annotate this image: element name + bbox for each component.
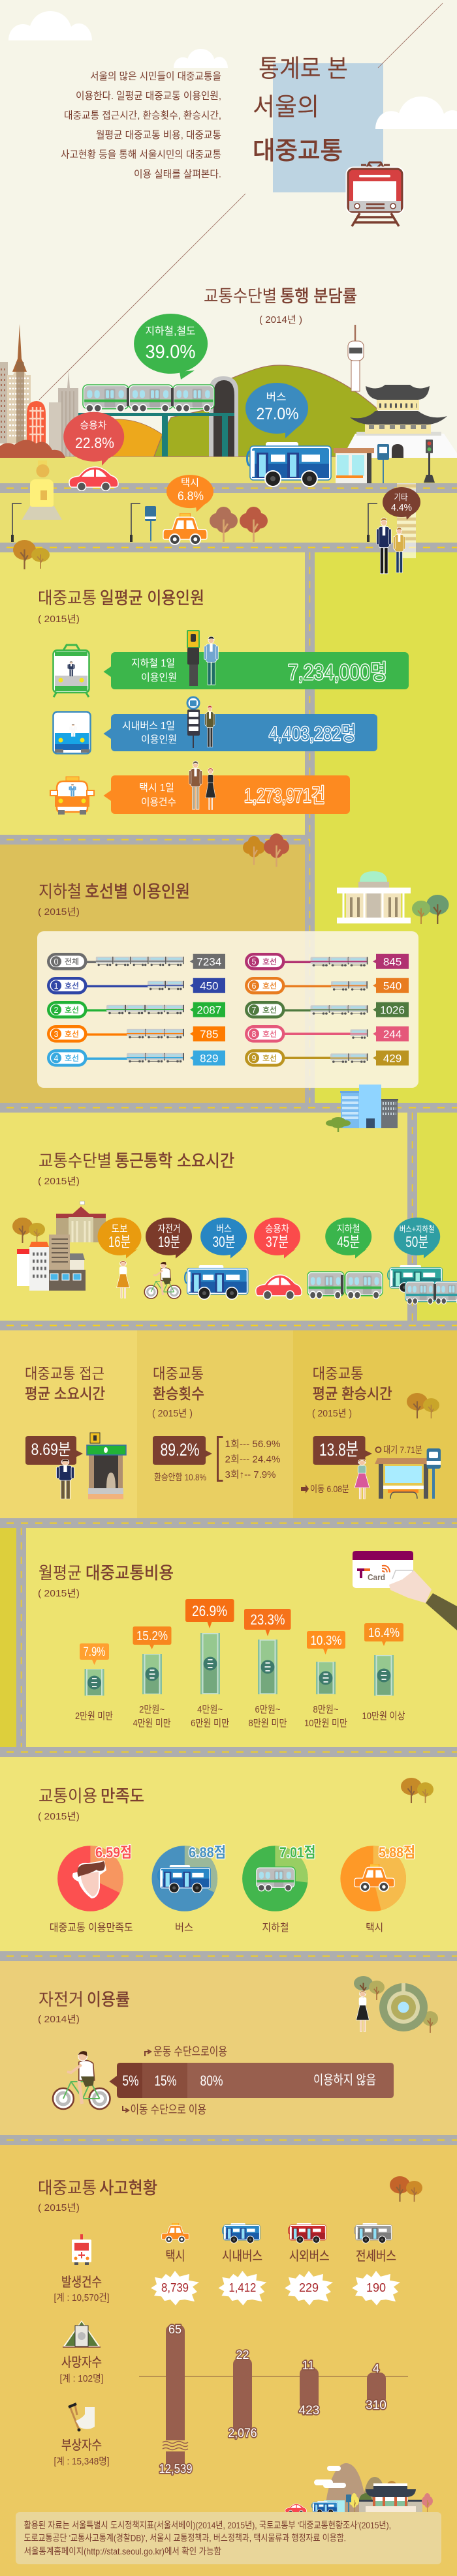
row: line 6: 6 bbox=[252, 981, 257, 991]
icon: red train bbox=[348, 162, 402, 226]
row: all lines bbox=[48, 954, 225, 969]
column: intercity bus: 11 bbox=[302, 2359, 314, 2372]
callout: cycling time: 자전거 bbox=[158, 1223, 180, 1235]
chart: bicycle share bar bbox=[109, 2045, 394, 2116]
callout: bus share: 27.0% bbox=[256, 405, 299, 423]
intro text: 대중교통 접근시간, 환승횟수, 환승시간, bbox=[64, 110, 221, 121]
callout: car share: 승용차 bbox=[80, 420, 107, 431]
icon: T-card and hand bbox=[353, 1551, 457, 1630]
stat bar: taxi trips: 1,273,971건 bbox=[244, 785, 325, 807]
icon: T-card and hand: Card bbox=[368, 1572, 385, 1582]
callout: subway share bbox=[134, 314, 208, 380]
row: line 9 bbox=[246, 1051, 409, 1066]
scene: street furniture bbox=[11, 440, 435, 542]
heading: satisfaction bbox=[38, 1778, 433, 1822]
chart: bicycle share bar: 운동 수단으로이용 bbox=[153, 2045, 227, 2058]
row: all lines: 전체 bbox=[65, 957, 79, 966]
panel: access time: 대중교통 접근 bbox=[25, 1365, 104, 1382]
stat bar: subway ridership: 7,234,000명 bbox=[288, 660, 387, 684]
footer: sources: 서울통계홈페이지(http://stat.seoul.go.kr)에서 확인 가능함 bbox=[24, 2546, 221, 2556]
panel: transfer time: 13.8분 bbox=[319, 1440, 358, 1460]
panel: transfer time: 대중교통 bbox=[313, 1365, 364, 1382]
row labels: accident counts: 사망자수 bbox=[61, 2355, 102, 2370]
panel: transfer time: 평균 환승시간 bbox=[313, 1385, 392, 1402]
icon: memorial wreath bbox=[63, 2320, 101, 2347]
column: charter bus: 전세버스 bbox=[356, 2249, 396, 2264]
icon: subway sign and commuter bbox=[187, 631, 218, 686]
chart: subway satisfaction pie: 지하철 bbox=[262, 1922, 289, 1934]
icon: commute bus bbox=[185, 1265, 248, 1299]
row labels: accident counts: [계 : 15,348명] bbox=[54, 2456, 110, 2467]
icon: subway driver bbox=[54, 645, 89, 697]
bar: under 20k won: 7.9% bbox=[84, 1645, 106, 1659]
callout: walking time: 16분 bbox=[108, 1233, 131, 1250]
icon: king statue bbox=[22, 460, 62, 520]
bar: 40k to 60k won: 6만원 미만 bbox=[191, 1718, 229, 1729]
panel: access time: 8.69분 bbox=[31, 1441, 71, 1459]
bar: 60k to 80k won: 23.3% bbox=[251, 1611, 285, 1628]
panel: transfer count bbox=[152, 1365, 281, 1482]
row: line 3: 785 bbox=[200, 1028, 218, 1040]
row: line 8: 8 bbox=[252, 1030, 257, 1039]
footer: sources: 활용된 자료는 서울특별시 도시정책지표(서울서베이)(2014년, 2015년), 국토교통부 '대중교통현황조사'(2015년), bbox=[24, 2520, 391, 2530]
heading: daily ridership: 일평균 이용인원 bbox=[100, 588, 204, 608]
column: charter bus: 310 bbox=[366, 2399, 386, 2412]
icon: bus stop and commuter bbox=[187, 697, 215, 748]
column: taxi: 택시 bbox=[166, 2249, 185, 2264]
column: city bus: 2,076 bbox=[228, 2427, 257, 2440]
heading: accidents: 사고현황 bbox=[99, 2178, 157, 2198]
column: city bus bbox=[218, 2223, 266, 2440]
icon: taxi driver bbox=[50, 777, 94, 815]
icon: bus driver bbox=[54, 712, 90, 754]
row labels: accident counts: 부상자수 bbox=[61, 2438, 102, 2453]
callout: subway time: 45분 bbox=[337, 1233, 360, 1250]
panel: transfer count: ( 2015년 ) bbox=[152, 1408, 193, 1419]
footer: sources: 도로교통공단 '교통사고통계(경찰DB)', 서울시 교통정책과, 버스정책과, 택시물류과 행정자료 이용함. bbox=[24, 2533, 346, 2543]
callout: walking time: 도보 bbox=[111, 1223, 128, 1235]
row: line 7: 1026 bbox=[380, 1004, 405, 1016]
chart: bicycle share bar: 이용하지 않음 bbox=[313, 2073, 376, 2088]
heading: bicycle use: ( 2014년) bbox=[38, 2014, 80, 2025]
icon: commute subway bbox=[307, 1272, 383, 1298]
row: line 8: 244 bbox=[383, 1028, 402, 1040]
panel: transfer time: ( 2015년 ) bbox=[312, 1408, 352, 1419]
panel: access time: 평균 소요시간 bbox=[25, 1385, 105, 1402]
heading: commute time bbox=[38, 1151, 234, 1187]
callout: bus share bbox=[245, 383, 308, 438]
title: 대중교통 bbox=[253, 138, 343, 165]
callout: car time: 승용차 bbox=[265, 1223, 289, 1235]
bar: 60k to 80k won: 8만원 미만 bbox=[248, 1718, 287, 1729]
callout: other share bbox=[383, 487, 420, 520]
row: line 3 bbox=[48, 1026, 225, 1041]
heading: ridership by subway line: 지하철 bbox=[39, 882, 82, 901]
chart: subway satisfaction pie: 7.01점 bbox=[279, 1844, 316, 1861]
heading: commute time: 교통수단별 bbox=[39, 1151, 112, 1171]
callout: walking time bbox=[98, 1218, 141, 1259]
icon: ambulance bbox=[72, 2234, 91, 2265]
panel: transfer count: 3회↑-- 7.9% bbox=[225, 1469, 276, 1480]
panel: access time bbox=[25, 1365, 126, 1499]
stat bar: taxi trips: 이용건수 bbox=[141, 796, 176, 808]
icon: taxi commuters bbox=[189, 761, 215, 809]
row labels: accident counts: [계 : 102명] bbox=[60, 2373, 103, 2384]
icon: commute car bbox=[256, 1275, 302, 1299]
bar: 20k to 40k won: 4만원 미만 bbox=[133, 1718, 171, 1729]
icon: park and runner bbox=[354, 1976, 438, 2033]
callout: bus share: 버스 bbox=[266, 391, 286, 403]
column: charter bus bbox=[352, 2223, 400, 2412]
icon: town buildings bbox=[12, 1201, 106, 1291]
row: line 5: 호선 bbox=[262, 957, 277, 966]
bar: 60k to 80k won bbox=[244, 1609, 291, 1729]
chart: monthly cost bills bbox=[75, 1599, 405, 1729]
bar: 20k to 40k won bbox=[133, 1626, 171, 1729]
footer: sources bbox=[16, 2512, 441, 2564]
panel: transfer time: 대기 7.71분 bbox=[383, 1445, 422, 1455]
scene: hills, bridge and tunnel bbox=[46, 365, 398, 457]
heading: daily ridership: 대중교통 bbox=[38, 588, 97, 608]
callout: taxi share: 6.8% bbox=[178, 490, 204, 503]
intro text: 월평균 대중교통 비용, 대중교통 bbox=[96, 129, 221, 141]
callout: other share: 4.4% bbox=[391, 502, 412, 513]
row: line 7 bbox=[246, 1002, 409, 1017]
chart: overall satisfaction pie bbox=[50, 1844, 133, 1934]
icon: office buildings and bush bbox=[326, 1085, 398, 1132]
callout: car time bbox=[254, 1218, 300, 1259]
column: city bus: 22 bbox=[236, 2348, 249, 2361]
callout: bus time: 30분 bbox=[213, 1233, 235, 1250]
callout: subway share: 39.0% bbox=[145, 342, 196, 363]
panel: subway line table bbox=[37, 931, 418, 1088]
panel: transfer count: 2회--- 24.4% bbox=[225, 1454, 281, 1465]
scene: skyscrapers bbox=[0, 324, 78, 458]
column: intercity bus: 시외버스 bbox=[289, 2249, 330, 2264]
row: line 4: 호선 bbox=[65, 1054, 79, 1062]
heading: ridership by subway line bbox=[38, 882, 190, 918]
bar: under 20k won bbox=[75, 1643, 113, 1722]
heading: modal share: 교통수단별 bbox=[204, 286, 277, 306]
heading: satisfaction: 만족도 bbox=[101, 1786, 144, 1806]
row: line 4: 829 bbox=[200, 1052, 218, 1064]
stat bar: bus ridership: 이용인원 bbox=[141, 734, 177, 745]
title: 서울의 bbox=[253, 94, 319, 121]
scene: seoul tower and palace gate bbox=[342, 325, 457, 458]
column: intercity bus: 423 bbox=[299, 2404, 319, 2418]
row: line 1: 1 bbox=[54, 981, 59, 991]
heading: ridership by subway line: 호선별 이용인원 bbox=[85, 882, 190, 901]
column: taxi: 65 bbox=[168, 2323, 181, 2336]
heading: monthly cost: 대중교통비용 bbox=[86, 1563, 174, 1583]
stat bar: bus ridership: 4,403,282명 bbox=[269, 723, 356, 745]
bar: 80k to 100k won bbox=[304, 1631, 347, 1729]
intro text bbox=[61, 70, 221, 180]
row: line 5: 5 bbox=[252, 957, 257, 966]
column: city bus: 시내버스 bbox=[222, 2249, 262, 2264]
callout: subway time bbox=[325, 1218, 371, 1259]
row: line 2 bbox=[48, 1002, 225, 1017]
row: line 2: 2087 bbox=[197, 1004, 221, 1016]
callout: subway share: 지하철,철도 bbox=[145, 325, 196, 337]
bar: 80k to 100k won: 10만원 미만 bbox=[304, 1718, 347, 1729]
bar: under 20k won: 2만원 미만 bbox=[75, 1711, 113, 1722]
heading: accidents: 대중교통 bbox=[38, 2178, 97, 2198]
heading: accidents: ( 2015년) bbox=[38, 2202, 80, 2213]
callout: bubble for bus plus subway time bbox=[394, 1218, 440, 1259]
callout: cycling time: 19분 bbox=[158, 1233, 180, 1250]
heading: satisfaction: 교통이용 bbox=[39, 1786, 97, 1806]
row: line 1 bbox=[48, 978, 225, 993]
column: intercity bus: 229 bbox=[299, 2281, 319, 2294]
icon: cyclist with helmet bbox=[53, 2051, 110, 2109]
stat bar: taxi trips: 택시 1일 bbox=[139, 782, 174, 794]
row: line 4: 4 bbox=[54, 1054, 59, 1063]
row: line 4 bbox=[48, 1051, 225, 1066]
row: all lines: 0 bbox=[54, 957, 59, 966]
column: taxi: 8,739 bbox=[161, 2281, 189, 2294]
column: city bus: 1,412 bbox=[228, 2281, 256, 2294]
row labels: accident counts bbox=[54, 2234, 110, 2467]
panel: transfer count: 89.2% bbox=[161, 1440, 200, 1460]
row: line 6: 호선 bbox=[262, 981, 277, 990]
chart: bicycle share bar: 5% bbox=[123, 2073, 138, 2089]
row: line 8 bbox=[246, 1026, 409, 1041]
row: line 6 bbox=[246, 978, 409, 993]
row: line 7: 호선 bbox=[262, 1006, 277, 1014]
chart: overall satisfaction pie: 6.59점 bbox=[95, 1844, 132, 1861]
callout: car share bbox=[63, 412, 124, 466]
callout: car time: 37분 bbox=[266, 1233, 289, 1250]
icon: elevated subway train bbox=[83, 385, 214, 412]
header: clouds and blue panel bbox=[8, 3, 457, 400]
icon: closing street scene bbox=[285, 2463, 433, 2514]
icon: taxi bbox=[163, 513, 207, 545]
chart: taxi satisfaction pie: 5.88점 bbox=[379, 1844, 415, 1861]
heading: bicycle use: 자전거 bbox=[39, 1990, 84, 2009]
row: line 1: 호선 bbox=[65, 981, 79, 990]
icon: pedestrians bbox=[377, 518, 405, 574]
heading: monthly cost: ( 2015년) bbox=[38, 1588, 80, 1599]
bar: 20k to 40k won: 2만원~ bbox=[139, 1704, 165, 1715]
heading: satisfaction: ( 2015년) bbox=[38, 1811, 80, 1822]
heading: bicycle use bbox=[38, 1990, 130, 2025]
callout: cycling time bbox=[146, 1218, 192, 1259]
row: all lines: 7234 bbox=[197, 955, 221, 968]
icon: red car bbox=[69, 467, 118, 490]
column: taxi: 12,539 bbox=[159, 2463, 192, 2476]
callout: subway time: 지하철 bbox=[337, 1223, 360, 1235]
title bbox=[253, 55, 348, 165]
row: line 7: 7 bbox=[252, 1006, 257, 1015]
stat bar: bus ridership bbox=[103, 714, 377, 751]
column: intercity bus bbox=[285, 2223, 333, 2418]
intro text: 이용 실태를 살펴본다. bbox=[134, 168, 221, 180]
row: line 5 bbox=[246, 954, 409, 969]
heading: monthly cost bbox=[38, 1563, 174, 1599]
heading: daily ridership: ( 2015년) bbox=[38, 614, 80, 625]
chart: bus satisfaction pie: 6.88점 bbox=[189, 1844, 226, 1861]
heading: daily ridership bbox=[38, 588, 204, 625]
stat bar: bus ridership: 시내버스 1일 bbox=[122, 720, 175, 732]
panel: transfer time bbox=[301, 1365, 441, 1499]
heading: commute time: 통근통학 소요시간 bbox=[115, 1151, 234, 1171]
column: charter bus: 4 bbox=[373, 2362, 379, 2375]
icon: crutch and cast bbox=[69, 2404, 95, 2431]
icon: trees and assembly hall bbox=[243, 833, 449, 924]
icon: cyclist bbox=[144, 1262, 181, 1298]
title: 통계로 본 bbox=[259, 55, 348, 83]
row: line 1: 450 bbox=[200, 980, 218, 992]
chart: subway satisfaction pie bbox=[242, 1844, 316, 1934]
chart: overall satisfaction pie: 대중교통 이용만족도 bbox=[50, 1922, 133, 1934]
stat bar: taxi trips bbox=[103, 775, 350, 814]
heading: monthly cost: 월평균 bbox=[39, 1563, 82, 1583]
chart: taxi satisfaction pie bbox=[340, 1844, 415, 1934]
column: charter bus: 190 bbox=[366, 2281, 386, 2294]
row: line 5: 845 bbox=[383, 955, 402, 968]
heading: ridership by subway line: ( 2015년) bbox=[38, 906, 80, 918]
row: line 2: 2 bbox=[54, 1006, 59, 1015]
stat bar: subway ridership bbox=[103, 652, 409, 689]
bar: 60k to 80k won: 6만원~ bbox=[255, 1704, 281, 1715]
callout: taxi share: 택시 bbox=[181, 477, 199, 488]
chart: bicycle share bar: 80% bbox=[200, 2073, 223, 2089]
row: line 9: 9 bbox=[252, 1054, 257, 1063]
panel: transfer count: 1회--- 56.9% bbox=[225, 1439, 281, 1450]
stat bar: subway ridership: 이용인원 bbox=[141, 672, 177, 683]
heading: modal share: ( 2014년 ) bbox=[259, 314, 302, 325]
heading: commute time: ( 2015년) bbox=[38, 1176, 80, 1187]
row: line 9: 호선 bbox=[262, 1054, 277, 1062]
row: line 6: 540 bbox=[383, 980, 402, 992]
icon: walking woman bbox=[117, 1261, 129, 1298]
bar: 80k to 100k won: 10.3% bbox=[311, 1634, 342, 1648]
icon: bus plus subway bbox=[388, 1265, 457, 1304]
panel: transfer time: 이동 6.08분 bbox=[310, 1484, 349, 1494]
row: line 3: 3 bbox=[54, 1030, 59, 1039]
intro text: 서울의 많은 시민들이 대중교통을 bbox=[90, 70, 221, 82]
chart: bicycle share bar: 15% bbox=[154, 2073, 176, 2089]
heading: bicycle use: 이용률 bbox=[87, 1990, 130, 2009]
bar: 20k to 40k won: 15.2% bbox=[136, 1629, 168, 1643]
callout: other share: 기타 bbox=[394, 492, 408, 502]
callout: bus time: 버스 bbox=[216, 1223, 232, 1235]
icon: city bus bbox=[247, 442, 331, 487]
panel: transfer count: 환승안함 10.8% bbox=[154, 1472, 206, 1482]
chart: bicycle share bar: 이동 수단으로 이용 bbox=[131, 2103, 206, 2116]
heading: accidents bbox=[38, 2176, 422, 2213]
row labels: accident counts: 발생건수 bbox=[61, 2275, 102, 2290]
row: line 9: 429 bbox=[383, 1052, 402, 1064]
intro text: 이용한다. 일평균 대중교통 이용인원, bbox=[76, 90, 221, 102]
callout: bubble for bus plus subway time: 버스+지하철 bbox=[400, 1225, 435, 1234]
bar: over 100k won: 16.4% bbox=[368, 1626, 400, 1640]
bar: 40k to 60k won: 4만원~ bbox=[197, 1704, 223, 1715]
row: line 2: 호선 bbox=[65, 1006, 79, 1014]
bar: 40k to 60k won bbox=[185, 1599, 234, 1729]
column: taxi bbox=[151, 2223, 199, 2476]
roads bbox=[0, 483, 457, 2145]
panel: transfer count: 대중교통 bbox=[153, 1365, 204, 1382]
bar: 80k to 100k won: 8만원~ bbox=[313, 1704, 339, 1715]
callout: car share: 22.8% bbox=[75, 434, 114, 451]
heading: modal share bbox=[204, 286, 357, 325]
panel: transfer count: 환승횟수 bbox=[153, 1385, 204, 1402]
chart: bus satisfaction pie: 버스 bbox=[175, 1922, 193, 1934]
intro text: 사고현황 등을 통해 서울시민의 대중교통 bbox=[61, 149, 221, 160]
icon: trees bbox=[13, 507, 268, 569]
callout: bus time bbox=[200, 1218, 247, 1259]
row labels: accident counts: [계 : 10,570건] bbox=[54, 2292, 110, 2303]
bar: over 100k won bbox=[362, 1623, 405, 1722]
heading: modal share: 통행 분담률 bbox=[280, 286, 357, 306]
row: line 3: 호선 bbox=[65, 1030, 79, 1038]
scene: crosswalk bbox=[397, 483, 416, 558]
stat bar: subway ridership: 지하철 1일 bbox=[131, 657, 175, 669]
bar: over 100k won: 10만원 이상 bbox=[362, 1711, 405, 1722]
callout: bubble for bus plus subway time: 50분 bbox=[405, 1233, 428, 1250]
chart: bus satisfaction pie bbox=[151, 1844, 226, 1934]
chart: taxi satisfaction pie: 택시 bbox=[366, 1922, 383, 1934]
callout: taxi share bbox=[166, 475, 213, 512]
chart: accidents by vehicle bbox=[139, 2223, 408, 2476]
bar: 40k to 60k won: 26.9% bbox=[192, 1602, 227, 1619]
row: line 8: 호선 bbox=[262, 1030, 277, 1038]
